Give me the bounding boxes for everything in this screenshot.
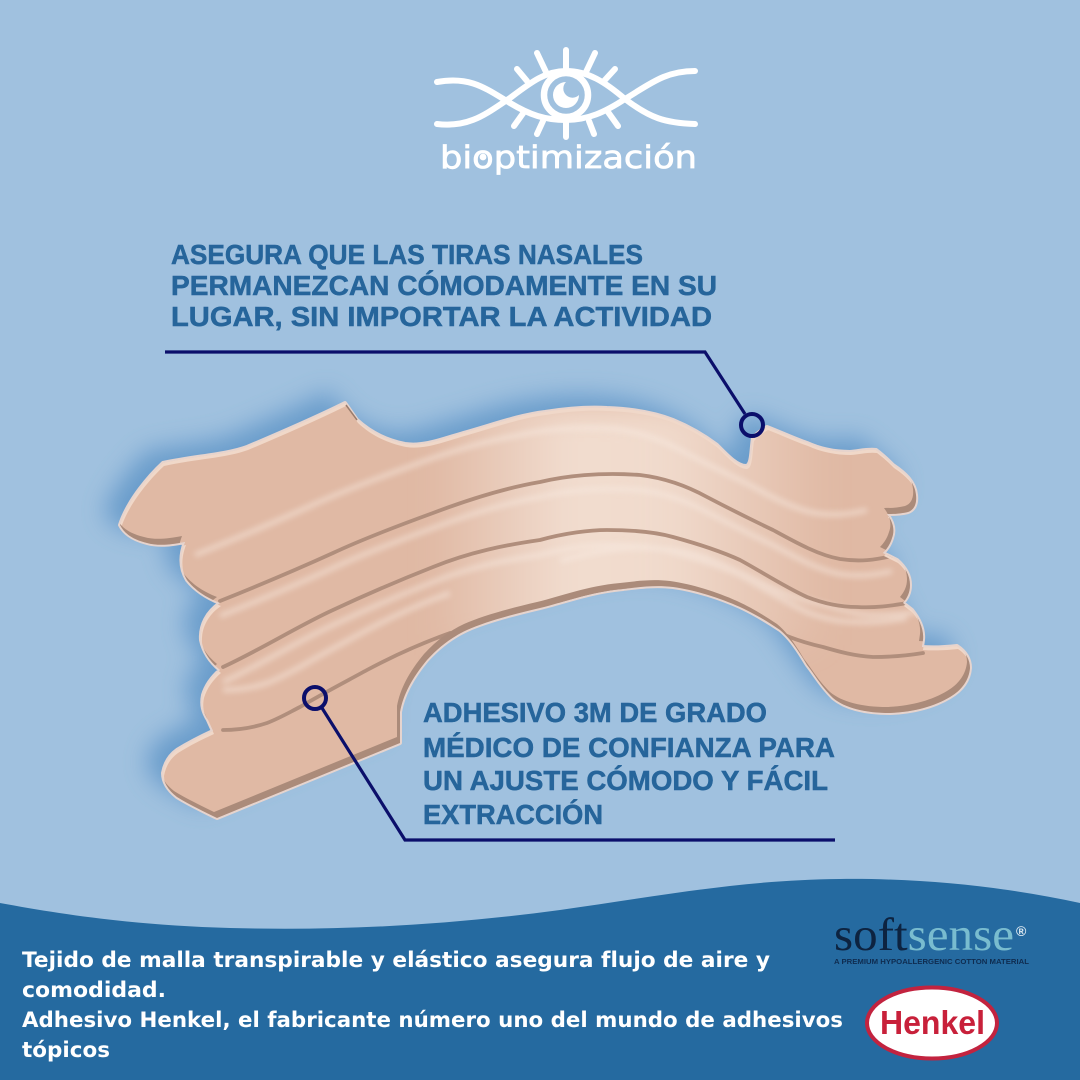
heading: top callout text: PERMANEZCAN CÓMODAMENTE EN SU [171,270,717,301]
logo: Henkel: Henkel [880,1004,985,1041]
bottom wave panel [0,879,1080,1080]
notch crease [346,405,357,420]
centre glow [456,410,798,632]
ridge highlights [195,428,923,690]
heading: lower callout text [423,697,835,830]
heading: lower callout text: EXTRACCIÓN [423,799,603,830]
footer text: Tejido de malla transpirable y elástico asegura flujo de aire y [22,948,770,973]
footer text: tópicos [22,1038,110,1063]
footer text: Adhesivo Henkel, el fabricante número uno del mundo de adhesivos [22,1008,843,1033]
logo: softsense: ® [1016,923,1027,939]
heading: lower callout text: UN AJUSTE CÓMODO Y FÁCIL [423,765,828,796]
callout: bottom leader line [304,687,835,840]
footer text: comodidad. [22,978,166,1003]
heading: top callout text: LUGAR, SIN IMPORTAR LA ACTIVIDAD [171,301,712,332]
icon: eye logo [437,50,695,137]
icon: wordmark eye dot [480,154,486,160]
logo: Henkel [867,988,997,1058]
pale top rim [120,403,966,780]
logo wordmark: bioptimización [440,140,697,176]
dark lower edge [120,482,970,818]
logo: bioptimización [437,50,697,176]
ridge shadows [220,474,923,730]
nasal strip illustration [96,384,972,820]
strip surface [120,403,970,818]
heading: top callout text [171,239,717,332]
logo: softsense: A PREMIUM HYPOALLERGENIC COTTON MATERIAL [834,957,1029,966]
heading: lower callout text: ADHESIVO 3M DE GRADO [423,697,767,728]
heading: top callout text: ASEGURA QUE LAS TIRAS NASALES [171,239,643,270]
strip pale border [120,403,970,818]
logo: softsense: softsense [834,909,1014,961]
icon: eye pupil [553,82,579,108]
strip shadow [104,391,954,806]
footer text [22,948,843,1063]
callout: top leader line [165,352,763,436]
heading: lower callout text: MÉDICO DE CONFIANZA PARA [423,732,835,763]
